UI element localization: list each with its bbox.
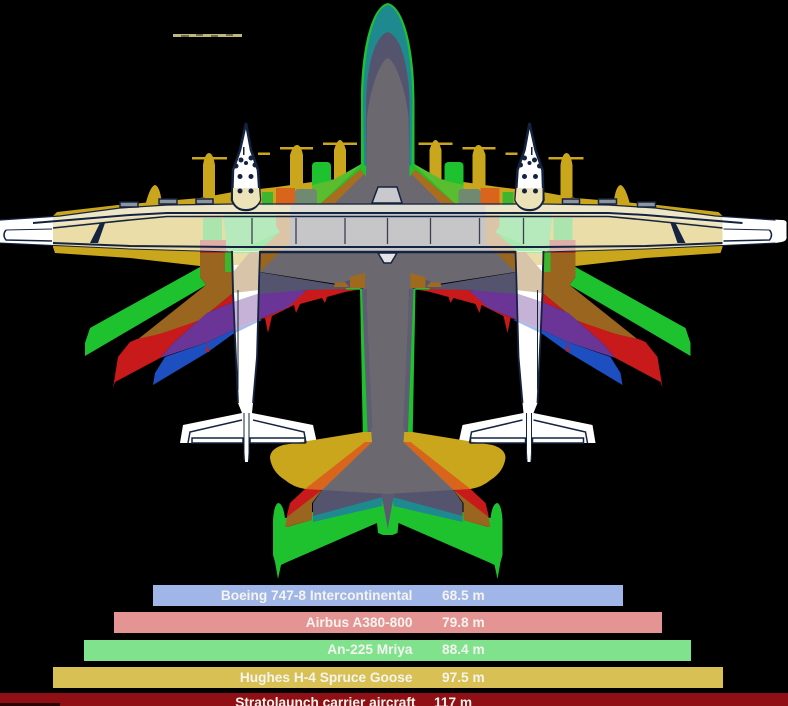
bar: Airbus A380: 79.8 m <box>442 615 485 630</box>
root slate and grey wing <box>258 172 388 294</box>
An-225 tail <box>273 496 388 579</box>
Boeing 747 wing <box>153 319 262 385</box>
Boeing 747 nose teal <box>363 5 388 175</box>
bar: Hughes H-4 <box>53 667 723 688</box>
Stratolaunch tailplane details <box>188 413 306 460</box>
bar: An-225: An-225 Mriya <box>327 642 413 657</box>
Stratolaunch wing pylon boxes <box>120 199 213 207</box>
Hughes H-4 engines and propellers <box>145 140 357 206</box>
bar: Airbus A380: Airbus A380-800 <box>306 615 413 630</box>
An-225 wing and engine <box>85 162 363 356</box>
bar: Boeing 747-8 <box>153 585 623 606</box>
bar: Hughes H-4: 97.5 m <box>442 670 485 685</box>
aircraft comparison: left half <box>0 3 389 579</box>
Grey forward fuselage <box>366 58 388 440</box>
belly detail below wing <box>378 253 397 263</box>
overlap patches above wing <box>276 167 366 206</box>
Hughes tail <box>270 432 388 493</box>
Hughes H-4 wing <box>53 178 345 266</box>
Stratolaunch payload rocket <box>232 123 260 210</box>
Stratolaunch wing outlines <box>0 204 388 403</box>
Airbus nose slate <box>366 32 388 175</box>
Boeing tail slate <box>313 490 388 522</box>
cockpit detail <box>372 187 402 203</box>
overlap tail strip <box>305 442 372 490</box>
bar: Boeing 747-8: Boeing 747-8 Intercontinental <box>221 588 412 603</box>
A380 tail tip <box>287 489 322 527</box>
bar: Hughes H-4: Hughes H-4 Spruce Goose <box>240 670 413 685</box>
Stratolaunch translucent wing panel <box>53 204 388 403</box>
A380 trailing edge right of boom <box>206 288 362 352</box>
bar: Airbus A380 <box>114 612 662 633</box>
bar: An-225 <box>84 640 691 661</box>
An-225 lower fuselage strip <box>360 289 369 444</box>
An-225 fuselage and nose <box>361 3 388 440</box>
scale bar <box>173 34 242 37</box>
aircraft comparison: right half mirrored <box>386 3 787 579</box>
purple overlap <box>160 290 307 358</box>
grey rear fuselage <box>322 428 389 494</box>
Boeing tail teal edge <box>313 497 383 522</box>
Airbus A380 wing <box>113 293 233 388</box>
Airbus lower fuselage slate strip <box>362 289 375 444</box>
dark slanted wing mark <box>90 223 105 243</box>
Stratolaunch wing upper pale band <box>53 205 388 226</box>
tail centre spike <box>381 492 388 530</box>
bar: Boeing 747-8: 68.5 m <box>442 588 485 603</box>
wing centre line <box>386 218 388 244</box>
Stratolaunch white base silhouette <box>0 204 388 462</box>
brown overlap below wing <box>137 252 280 340</box>
overlap patches under wing panel <box>200 215 297 272</box>
bar: Stratolaunch <box>0 693 788 706</box>
bar: An-225: 88.4 m <box>442 642 485 657</box>
brown tail overlap <box>285 490 322 527</box>
